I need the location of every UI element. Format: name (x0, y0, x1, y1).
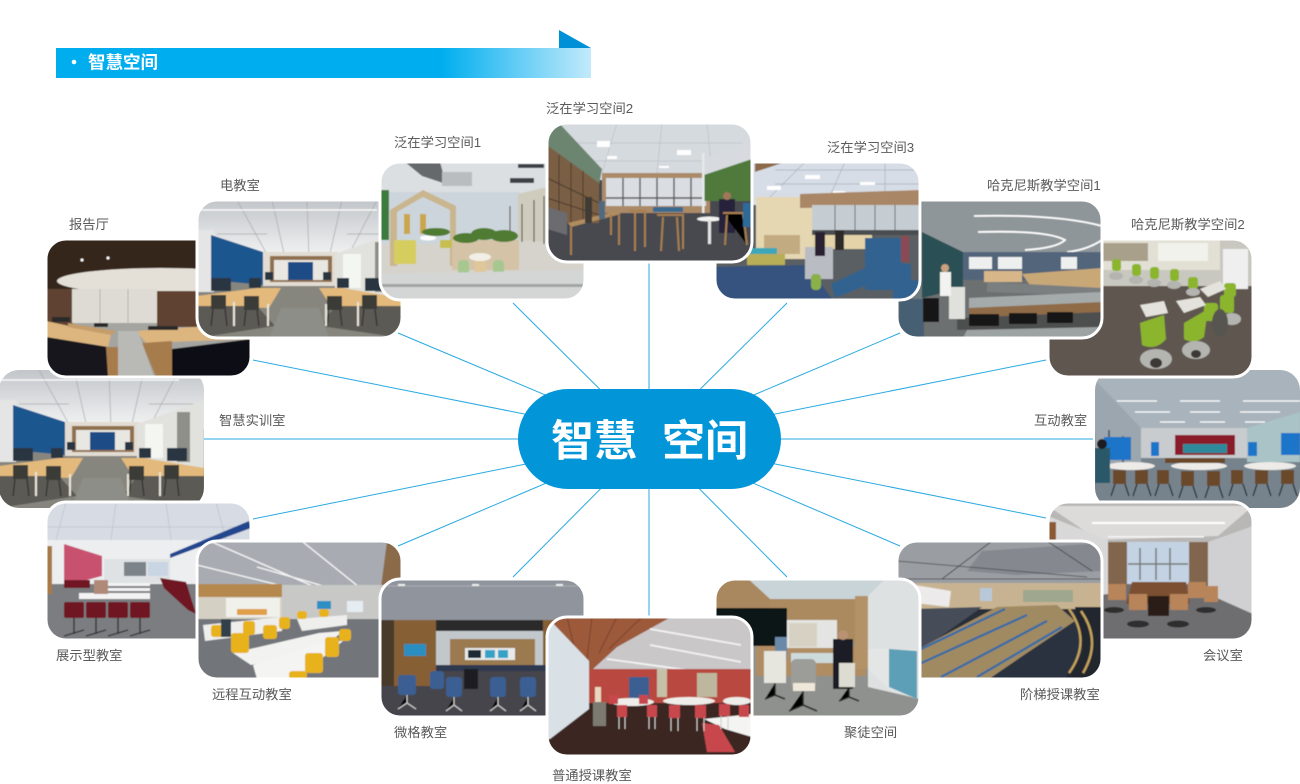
label: 哈克尼斯教学空间2 (1131, 217, 1245, 232)
label: 远程互动教室 (212, 686, 292, 702)
panel: 报告厅 (48, 218, 250, 378)
photo (716, 580, 918, 716)
label: 报告厅 (69, 217, 109, 232)
panel: 哈克尼斯教学空间1 (894, 178, 1105, 341)
photo (1092, 367, 1300, 511)
label: 展示型教室 (56, 647, 122, 663)
photo (544, 120, 755, 264)
panel: 展示型教室 (43, 499, 254, 663)
photo (1050, 240, 1252, 376)
photo (382, 580, 584, 716)
border (715, 162, 920, 300)
border (897, 541, 1102, 679)
photo (198, 202, 400, 336)
panel: 泛在学习空间3 (712, 140, 923, 303)
photo (716, 164, 918, 298)
section header banner (56, 30, 591, 78)
label: 泛在学习空间2 (546, 101, 633, 116)
border (380, 162, 585, 300)
hub title: 空间 (662, 418, 748, 466)
photo (1050, 504, 1252, 638)
border (547, 123, 752, 262)
panel: 智慧实训室 (0, 367, 285, 511)
photo (0, 367, 207, 511)
photo (48, 504, 250, 638)
label: 阶梯授课教室 (1020, 686, 1100, 702)
label: 聚徒空间 (844, 725, 897, 740)
border (547, 617, 752, 756)
border (715, 579, 920, 717)
banner title: 智慧空间 (88, 52, 158, 72)
border (197, 541, 402, 679)
border (380, 579, 585, 717)
label: 微格教室 (394, 724, 447, 740)
photo (48, 240, 250, 376)
label: 电教室 (220, 177, 260, 193)
panel: 普通授课教室 (544, 614, 755, 783)
border (897, 200, 1102, 338)
label: 会议室 (1203, 647, 1243, 663)
photo (544, 614, 755, 758)
label: 泛在学习空间3 (827, 140, 914, 155)
panel: 电教室 (194, 177, 405, 341)
label: 泛在学习空间1 (394, 135, 481, 150)
panel: 哈克尼斯教学空间2 (1045, 217, 1256, 380)
photo (382, 164, 584, 298)
hub title: 智慧 (551, 418, 637, 466)
border (1048, 502, 1253, 640)
label: 互动教室 (1034, 412, 1087, 428)
connector lines from hub to photos (204, 262, 1093, 617)
label: 哈克尼斯教学空间1 (987, 178, 1101, 193)
label: 普通授课教室 (552, 767, 632, 783)
banner bullet (72, 60, 76, 64)
border (46, 239, 251, 377)
hub pill (518, 389, 781, 489)
panel: 泛在学习空间1 (377, 135, 588, 303)
panel: 阶梯授课教室 (894, 538, 1105, 702)
label: 智慧实训室 (219, 412, 285, 428)
border (1048, 239, 1253, 377)
panel: 会议室 (1045, 499, 1256, 663)
panel: 聚徒空间 (712, 576, 923, 740)
central hub (518, 389, 781, 489)
panel: 泛在学习空间2 (544, 101, 755, 264)
banner bar (56, 48, 591, 78)
panel: 互动教室 (1034, 367, 1300, 511)
border (46, 502, 251, 640)
photo (898, 202, 1100, 336)
border (197, 200, 402, 338)
banner fold triangle (559, 30, 591, 48)
photo (198, 542, 400, 678)
panel: 微格教室 (377, 576, 588, 740)
photo (898, 542, 1100, 678)
panel: 远程互动教室 (194, 538, 405, 702)
